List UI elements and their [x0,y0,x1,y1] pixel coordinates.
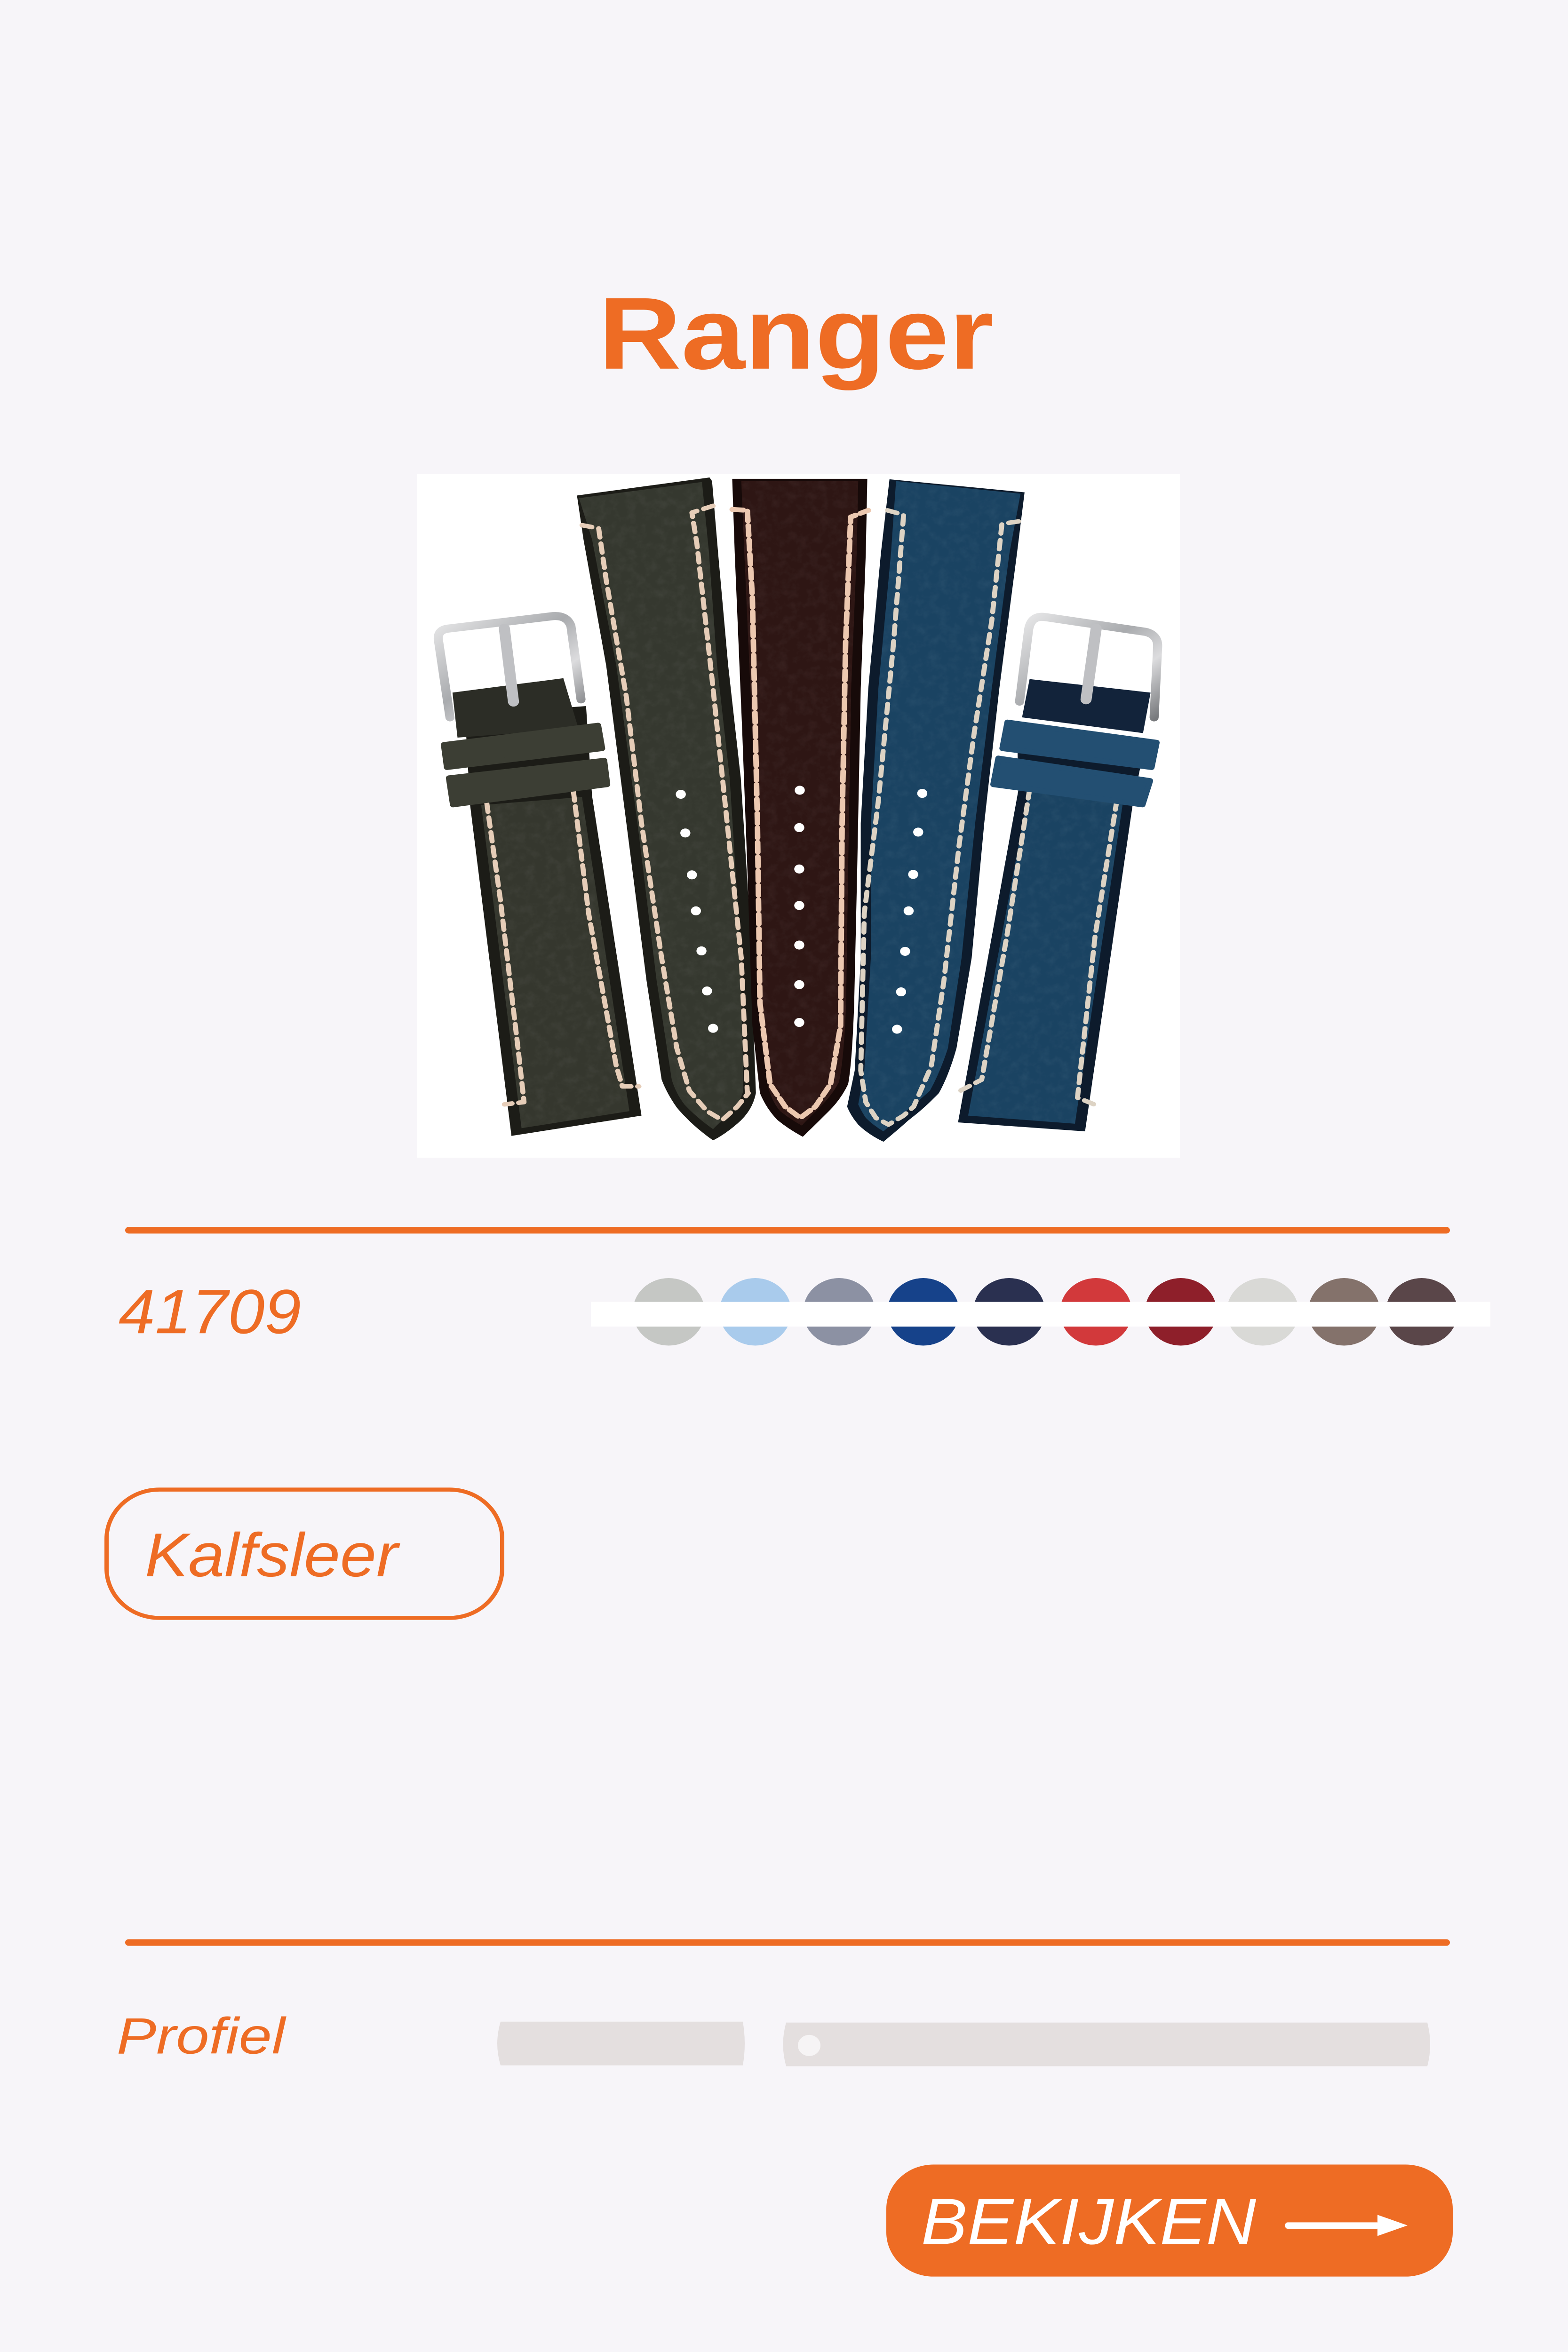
colour swatches [591,1278,1490,1345]
profile bar short [497,2022,745,2066]
divider bottom [125,1939,1450,1946]
product photo: watch straps [417,474,1180,1158]
profile bar long with dot [783,2023,1430,2066]
button label: BEKIJKEN [921,2185,1256,2258]
material label: Kalfsleer [145,1520,400,1589]
strap: long olive [577,477,756,1140]
material pill [106,1490,502,1618]
profile label: Profiel [117,2007,287,2064]
strap holes [676,786,927,1034]
article number: 41709 [119,1277,301,1347]
title: Ranger [598,276,994,390]
strap: short olive with buckle [438,616,642,1136]
strap: short blue with buckle [958,617,1158,1131]
divider top [125,1227,1450,1233]
icon: arrow [1285,2215,1408,2236]
strap: long blue [847,479,1025,1142]
button [886,2165,1453,2277]
strap: long brown [732,479,868,1137]
